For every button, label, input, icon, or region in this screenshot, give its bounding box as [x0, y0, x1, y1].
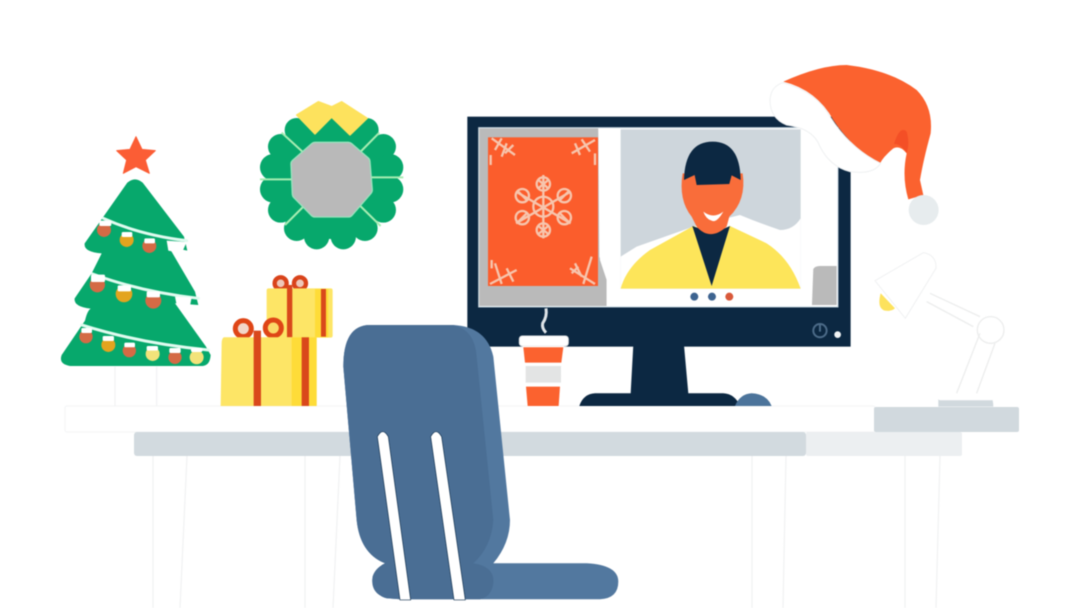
- power icon: [813, 324, 827, 337]
- call buttons: [690, 293, 733, 301]
- gifts: [221, 277, 333, 406]
- wreath: [260, 102, 403, 249]
- wreath bow: [297, 102, 367, 135]
- lamp base: [938, 395, 993, 407]
- large gift: [221, 320, 317, 406]
- hat brim: [770, 83, 881, 172]
- desk lamp: [875, 253, 1004, 407]
- white blob: [621, 215, 801, 289]
- coffee cup: [519, 308, 568, 407]
- tree trunk: [115, 367, 157, 406]
- office chair: [343, 325, 618, 600]
- lamp bulb: [879, 293, 895, 311]
- cup lid: [519, 336, 568, 346]
- corner grey block: [812, 266, 837, 305]
- corner snowflakes: [490, 138, 595, 284]
- person neck and face: [682, 173, 743, 234]
- christmas tree: [61, 137, 211, 406]
- chair back side: [343, 325, 618, 599]
- tree body: [61, 179, 211, 366]
- video call panel: [621, 129, 801, 289]
- monitor frame: [467, 117, 851, 347]
- baubles: [79, 221, 204, 364]
- garlands: [82, 218, 208, 350]
- wreath dividers: [260, 133, 403, 226]
- snowflake card: [488, 137, 598, 286]
- desk underside: [134, 432, 806, 456]
- small gift: [267, 277, 333, 338]
- wreath centre: [296, 147, 367, 212]
- desk legs: [153, 456, 940, 608]
- lamp arm: [927, 293, 1004, 393]
- stand blue accent: [735, 393, 772, 406]
- desk: [65, 406, 1019, 608]
- desk top: [65, 406, 875, 432]
- chair back front: [343, 325, 493, 599]
- steam: [542, 308, 546, 333]
- tree star: [117, 137, 155, 173]
- monitor stand: [579, 345, 740, 406]
- hat red: [783, 65, 931, 199]
- monitor: [467, 117, 851, 406]
- person body: [621, 226, 801, 289]
- chair slots: [377, 432, 465, 600]
- snowflake: [516, 175, 571, 238]
- wreath leaves: [260, 118, 403, 249]
- pompom: [909, 195, 939, 225]
- cup body: [523, 346, 564, 407]
- person hair: [684, 142, 741, 185]
- lamp shade: [875, 253, 936, 318]
- monitor screen: [479, 128, 838, 307]
- power light: [834, 331, 841, 338]
- santa hat: [770, 65, 939, 225]
- left panel: [479, 128, 613, 306]
